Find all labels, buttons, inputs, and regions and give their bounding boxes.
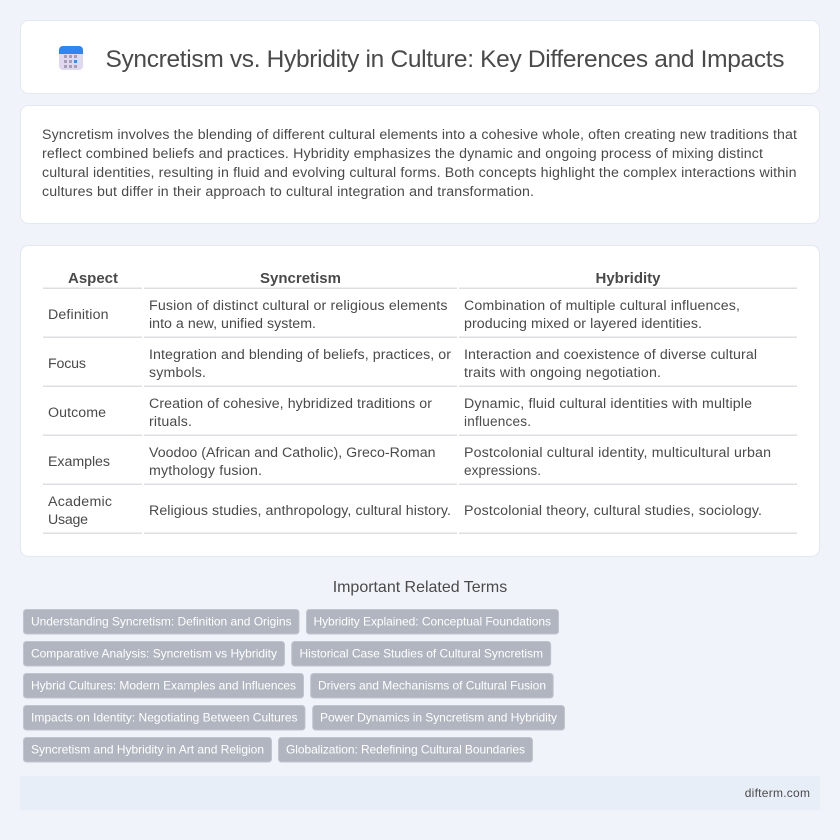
tag: Comparative Analysis: Syncretism vs Hybridity: [31, 646, 277, 660]
table header row: Syncretism: [260, 270, 341, 287]
header panel: [20, 20, 820, 94]
text block: intro: cultures but differ in their approach to cultural integration and transformation.: [42, 184, 534, 200]
row: outcome: Dynamic, fluid cultural identities with multiple: [464, 396, 752, 412]
tag: Syncretism and Hybridity in Art and Religion: [31, 742, 264, 756]
tag: [278, 738, 532, 762]
title: Syncretism vs. Hybridity in Culture: Key Differences and Impacts: [106, 46, 784, 73]
tag: [311, 674, 553, 698]
tag: [24, 610, 299, 634]
row: examples: Postcolonial cultural identity, multicultural urban: [464, 445, 771, 461]
row: definition: producing mixed or layered identities.: [464, 316, 702, 332]
text block: intro: Syncretism involves the blending of different cultural elements into a cohesive whole, often creating new traditions that: [42, 127, 797, 143]
row: outcome: Outcome: [48, 405, 106, 421]
text block: intro: reflect combined beliefs and practices. Hybridity emphasizes the dynamic and ongoing process of mixing distinct: [42, 146, 763, 162]
panel: intro paragraph: [20, 106, 820, 224]
row: definition: Definition: [48, 307, 108, 323]
tag: Power Dynamics in Syncretism and Hybridity: [320, 710, 557, 724]
tag: [306, 610, 558, 634]
row: definition: Fusion of distinct cultural or religious elements: [149, 298, 448, 314]
row: outcome: rituals.: [149, 414, 192, 430]
tag: Hybrid Cultures: Modern Examples and Influences: [31, 678, 296, 692]
row: examples: [48, 445, 771, 479]
table header row: Aspect: [68, 270, 118, 287]
row: outcome: influences.: [464, 414, 531, 429]
tag: Hybridity Explained: Conceptual Foundations: [314, 614, 551, 628]
tag: Globalization: Redefining Cultural Boundaries: [286, 742, 525, 756]
row: definition: [48, 298, 740, 332]
footer text: difterm.com: [745, 786, 810, 800]
text block: intro: [42, 127, 797, 200]
tag: Historical Case Studies of Cultural Syncretism: [300, 646, 543, 660]
row: academic usage: Religious studies, anthropology, cultural history.: [149, 503, 451, 519]
related term tags: [24, 610, 564, 762]
row: focus: symbols.: [149, 365, 206, 381]
table header row: Hybridity: [596, 270, 661, 287]
row: examples: Voodoo (African and Catholic), Greco-Roman: [149, 445, 436, 461]
tag: Drivers and Mechanisms of Cultural Fusion: [318, 678, 546, 692]
heading: related terms: Important Related Terms: [333, 579, 507, 596]
row: focus: Focus: [48, 356, 86, 372]
row: focus: Integration and blending of beliefs, practices, or: [149, 347, 451, 363]
row: examples: Examples: [48, 454, 110, 470]
row: academic usage: Usage: [48, 512, 88, 528]
row: outcome: Creation of cohesive, hybridized traditions or: [149, 396, 432, 412]
row: definition: Combination of multiple cultural influences,: [464, 298, 740, 314]
row: outcome: [48, 396, 752, 430]
tag: Understanding Syncretism: Definition and Origins: [31, 614, 292, 628]
tag: [24, 674, 304, 698]
tag: [24, 738, 272, 762]
tag: Impacts on Identity: Negotiating Between Cultures: [31, 710, 298, 724]
row: academic usage: Postcolonial theory, cultural studies, sociology.: [464, 503, 762, 519]
table header row: [68, 270, 661, 287]
row: focus: [48, 347, 757, 381]
tag: [313, 706, 564, 730]
icon: calendar: [59, 46, 83, 70]
row: focus: Interaction and coexistence of diverse cultural: [464, 347, 757, 363]
text block: intro: cultural identities, resulting in fluid and evolving cultural forms. Both concepts highlight the complex interactions within: [42, 165, 796, 181]
tag: [292, 642, 551, 666]
row: academic usage: Academic: [48, 494, 112, 510]
row: academic usage: [48, 494, 762, 528]
tag: [24, 706, 305, 730]
row: examples: expressions.: [464, 463, 541, 478]
footer bar: [20, 776, 820, 810]
row: examples: mythology fusion.: [149, 463, 262, 479]
row: definition: into a new, unified system.: [149, 316, 316, 332]
panel: comparison table: [20, 246, 820, 556]
tag: [24, 642, 284, 666]
row: focus: traits with ongoing negotiation.: [464, 365, 661, 381]
